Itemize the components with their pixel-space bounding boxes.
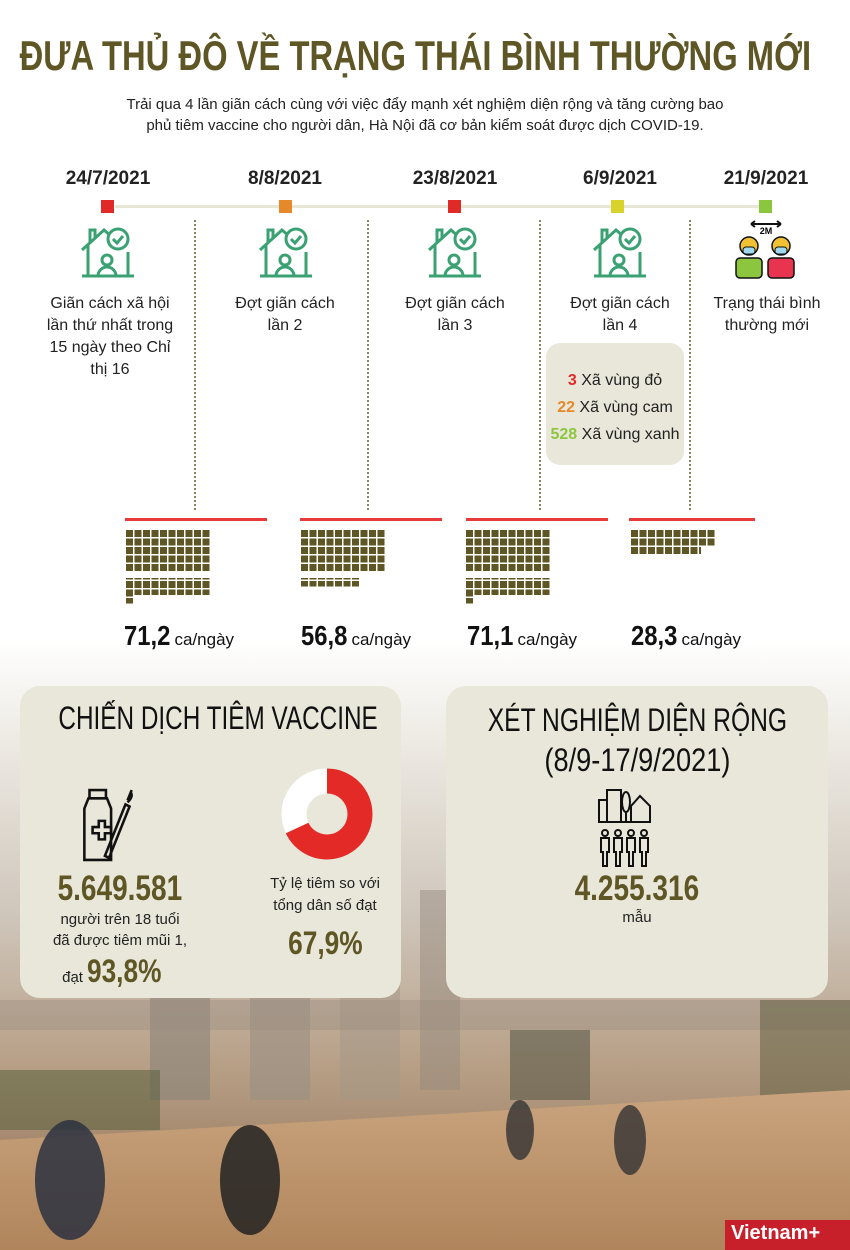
callout: zones: 22 Xã vùng cam	[557, 399, 673, 416]
text: ca/ngày	[352, 630, 411, 649]
stat: coverage: Tỷ lệ tiêm so với	[270, 875, 380, 892]
heading: testing: XÉT NGHIỆM DIỆN RỘNG	[487, 702, 787, 738]
icon: two people 2m	[735, 220, 795, 279]
text: 56,8	[301, 620, 347, 651]
panel: testing	[446, 686, 828, 998]
text: thường mới	[725, 317, 809, 334]
text: lần 2	[268, 317, 302, 334]
stat: samples: mẫu	[622, 909, 652, 926]
text: ca/ngày	[518, 630, 577, 649]
icon: house 4	[593, 228, 646, 278]
icon: vial and syringe	[83, 788, 133, 862]
labels: Giãn cách xã hội lần thứ nhất trong 15 ngày theo Chỉ thị 16	[47, 295, 173, 378]
text: 21/9/2021	[724, 168, 808, 189]
timeline line	[115, 205, 765, 208]
text: Đợt giãn cách	[405, 295, 505, 312]
chart: case squares	[125, 518, 755, 604]
title: ĐƯA THỦ ĐÔ VỀ TRẠNG THÁI BÌNH THƯỜNG MỚI	[19, 32, 811, 79]
numbers	[124, 620, 234, 651]
logo: Vietnam+: Vietnam+	[731, 1222, 820, 1244]
stat: samples: 4.255.316	[575, 869, 699, 908]
callout: zones: 528 Xã vùng xanh	[550, 426, 680, 443]
subtitle	[126, 96, 724, 134]
stat: coverage: 67,9%	[288, 925, 362, 961]
subtitle: phủ tiêm vaccine cho người dân, Hà Nội đã cơ bản kiểm soát được dịch COVID-19.	[146, 117, 704, 134]
stat: people vaccinated: người trên 18 tuổi	[60, 911, 180, 928]
stat: coverage	[270, 875, 380, 961]
text: lần 4	[603, 317, 637, 334]
stat: people vaccinated	[53, 869, 187, 989]
callout: zones: 3 Xã vùng đỏ	[568, 372, 662, 389]
numbers: ca/ngày	[174, 630, 234, 649]
stat: coverage: tổng dân số đạt	[273, 897, 377, 914]
callout: zones	[546, 343, 684, 465]
icon: house 1	[81, 228, 134, 278]
heading: testing	[487, 702, 787, 778]
chart: donut 67.9%	[282, 768, 372, 860]
text: ca/ngày	[682, 630, 741, 649]
icon: city and people	[598, 789, 651, 867]
text: 6/9/2021	[583, 168, 657, 189]
background photo	[0, 670, 850, 1250]
stat: people vaccinated: đạt	[62, 969, 83, 986]
stat: samples	[575, 869, 699, 926]
icon: house 3	[428, 228, 481, 278]
heading: vaccine: CHIẾN DỊCH TIÊM VACCINE	[59, 700, 378, 736]
logo: Vietnam+	[725, 1220, 850, 1250]
text: 28,3	[631, 620, 677, 651]
heading: testing: (8/9-17/9/2021)	[544, 742, 730, 778]
markers	[101, 200, 114, 213]
text: Đợt giãn cách	[570, 295, 670, 312]
icon: two people 2m: 2M	[760, 226, 772, 236]
subtitle: Trải qua 4 lần giãn cách cùng với việc đẩy mạnh xét nghiệm diện rộng và tăng cường bao	[126, 96, 724, 113]
panel: vaccine	[20, 686, 401, 998]
separators	[194, 220, 196, 510]
stat: people vaccinated: 5.649.581	[58, 869, 182, 908]
stat: people vaccinated: 93,8%	[87, 953, 162, 989]
text: lần 3	[438, 317, 472, 334]
text: Đợt giãn cách	[235, 295, 335, 312]
text: Trạng thái bình	[713, 295, 821, 312]
text: 8/8/2021	[248, 168, 322, 189]
text: 23/8/2021	[413, 168, 497, 189]
text: 71,1	[467, 620, 513, 651]
stat: people vaccinated: đã được tiêm mũi 1,	[53, 932, 187, 949]
numbers: 71,2	[124, 620, 170, 651]
dates: 24/7/2021	[66, 168, 150, 189]
icon: house 2	[259, 228, 312, 278]
